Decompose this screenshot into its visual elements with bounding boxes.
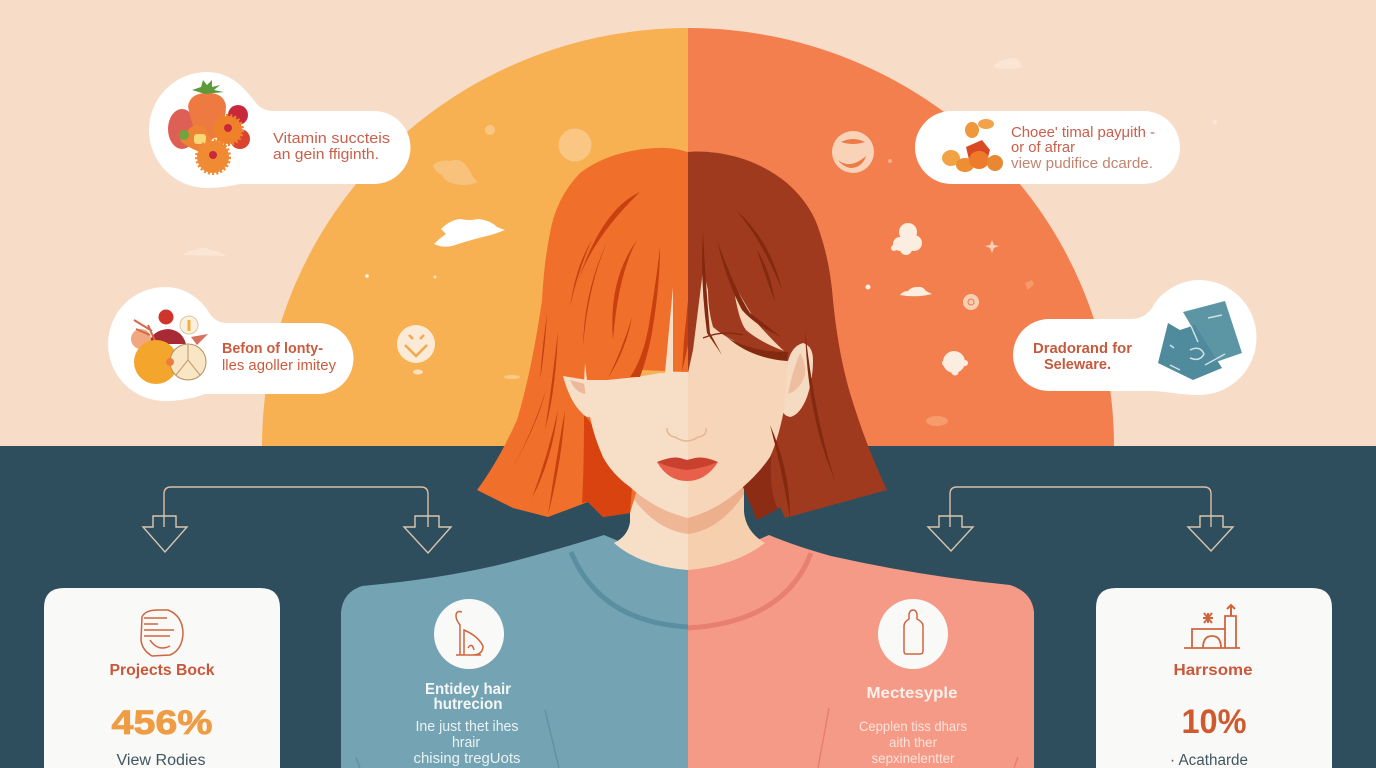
shirt collar lines [356, 552, 1018, 768]
callout: vitamin (top left): an gein ffiginth. [273, 146, 379, 163]
panel body text: sepxinelentter [872, 750, 955, 766]
right fringe skin sliver [733, 283, 784, 351]
right ear [782, 343, 813, 417]
face left half [584, 287, 688, 518]
face right half [688, 270, 788, 518]
sun semicircle [262, 28, 1114, 446]
neck [614, 470, 765, 570]
hair inner shadow left [582, 414, 632, 517]
background: lower dark band [0, 446, 1376, 768]
card heading: Harrsome [1174, 662, 1253, 679]
right sky decorations [832, 120, 1217, 426]
card panel [44, 588, 280, 768]
card value: 10% [1182, 703, 1246, 741]
icon circle: bottle [878, 599, 948, 669]
hair inner shadow right [743, 448, 778, 520]
left ear inner [570, 380, 585, 394]
icon: fruit plate [131, 310, 208, 384]
callout: choose (top right) [915, 111, 1180, 184]
panel body text: aith ther [889, 734, 937, 750]
panel body text [414, 719, 520, 767]
shirt right half [688, 535, 1034, 768]
callout text: Choee' timal payμith - [1011, 125, 1155, 141]
panel body text: Cepplen tiss dhars [859, 718, 967, 734]
icon: teal cards [1158, 301, 1242, 380]
hair left half [477, 148, 688, 517]
callout: vitamin (top left) [149, 72, 410, 188]
callout text: Befon of lonty- [222, 340, 323, 357]
callout: dradorand (right) [1013, 280, 1256, 395]
panel heading: Entidey hair [425, 681, 511, 698]
callout: nutrition (left) [108, 287, 354, 401]
card: Harrsome [1096, 588, 1332, 768]
panel heading: Mectesyple [866, 685, 958, 702]
callout bubble [108, 287, 354, 401]
icon: fruit cluster [168, 80, 250, 173]
figure: woman portrait [341, 148, 1034, 768]
callout text: Vitamin succteis [273, 130, 390, 147]
teal panel content [414, 599, 520, 767]
hair strands left [505, 192, 688, 515]
icon circle: hair tool [434, 599, 504, 669]
icon: building outline [1184, 605, 1240, 648]
background: upper peach band [0, 0, 1376, 446]
left ear [563, 376, 590, 417]
panel body text [859, 718, 967, 766]
panel body text: hrair [452, 735, 480, 751]
callout: choose (top right): or of afrar [1011, 140, 1075, 156]
icon: book outline [141, 610, 183, 656]
hair strands right [702, 210, 835, 518]
right ear inner [788, 353, 805, 394]
shirt left half [341, 535, 688, 768]
pink panel content [859, 599, 967, 766]
arrow connector: right pair [928, 487, 1233, 551]
callout: nutrition (left): lles agoller imitey [222, 357, 336, 374]
panel body text: Ine just thet ihes [416, 719, 518, 735]
callout bubble [915, 111, 1180, 184]
callout: dradorand (right): Seleware. [1044, 356, 1111, 373]
callout: choose (top right): view pudifice dcarde. [1011, 156, 1153, 172]
card value: 456% [112, 704, 212, 742]
hair right half [688, 152, 887, 520]
panel body text: chising tregUots [414, 751, 520, 767]
icon: nuts [942, 119, 1003, 172]
callout bubble [1013, 280, 1256, 395]
card: Projects Bock [44, 588, 280, 768]
callout text: Dradorand for [1033, 340, 1132, 357]
arrow connector: left pair [143, 487, 451, 553]
nose [667, 428, 706, 441]
callout bubble [149, 72, 410, 188]
closed eye line [703, 333, 743, 338]
left sky decorations [182, 58, 1022, 379]
card heading: Projects Bock [110, 662, 215, 679]
lips [657, 458, 718, 481]
panel heading line two: hutrecion [434, 696, 502, 713]
card panel [1096, 588, 1332, 768]
